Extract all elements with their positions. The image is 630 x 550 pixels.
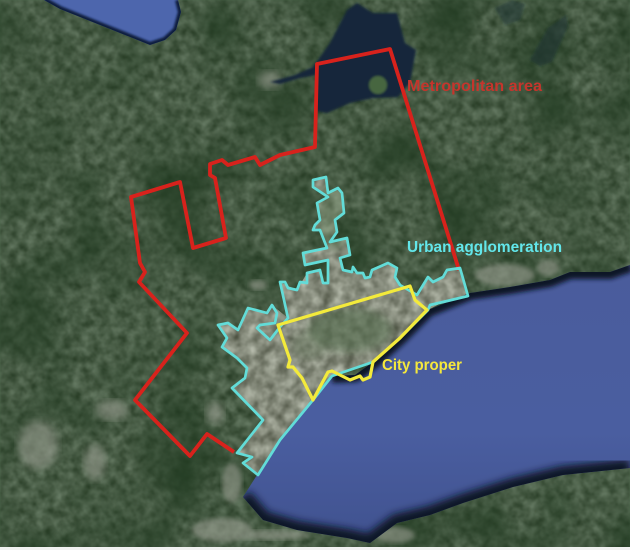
label: metropolitan area: Metropolitan area <box>407 78 542 95</box>
boundary: city proper (yellow) <box>278 286 427 400</box>
label: city proper: City proper <box>382 357 462 374</box>
boundary: urban agglomeration (cyan) <box>218 177 468 475</box>
urban fabric of the agglomeration <box>220 178 466 473</box>
label: urban agglomeration: Urban agglomeration <box>407 239 562 256</box>
white strip at bottom edge <box>0 547 630 550</box>
lake: large lake with dark shoreline <box>243 265 630 543</box>
lake: dark northern lake <box>270 0 568 113</box>
boundary: metropolitan area (red) <box>131 49 459 456</box>
lake: top-left <box>44 0 181 45</box>
suburban and town patches on land <box>18 71 559 543</box>
